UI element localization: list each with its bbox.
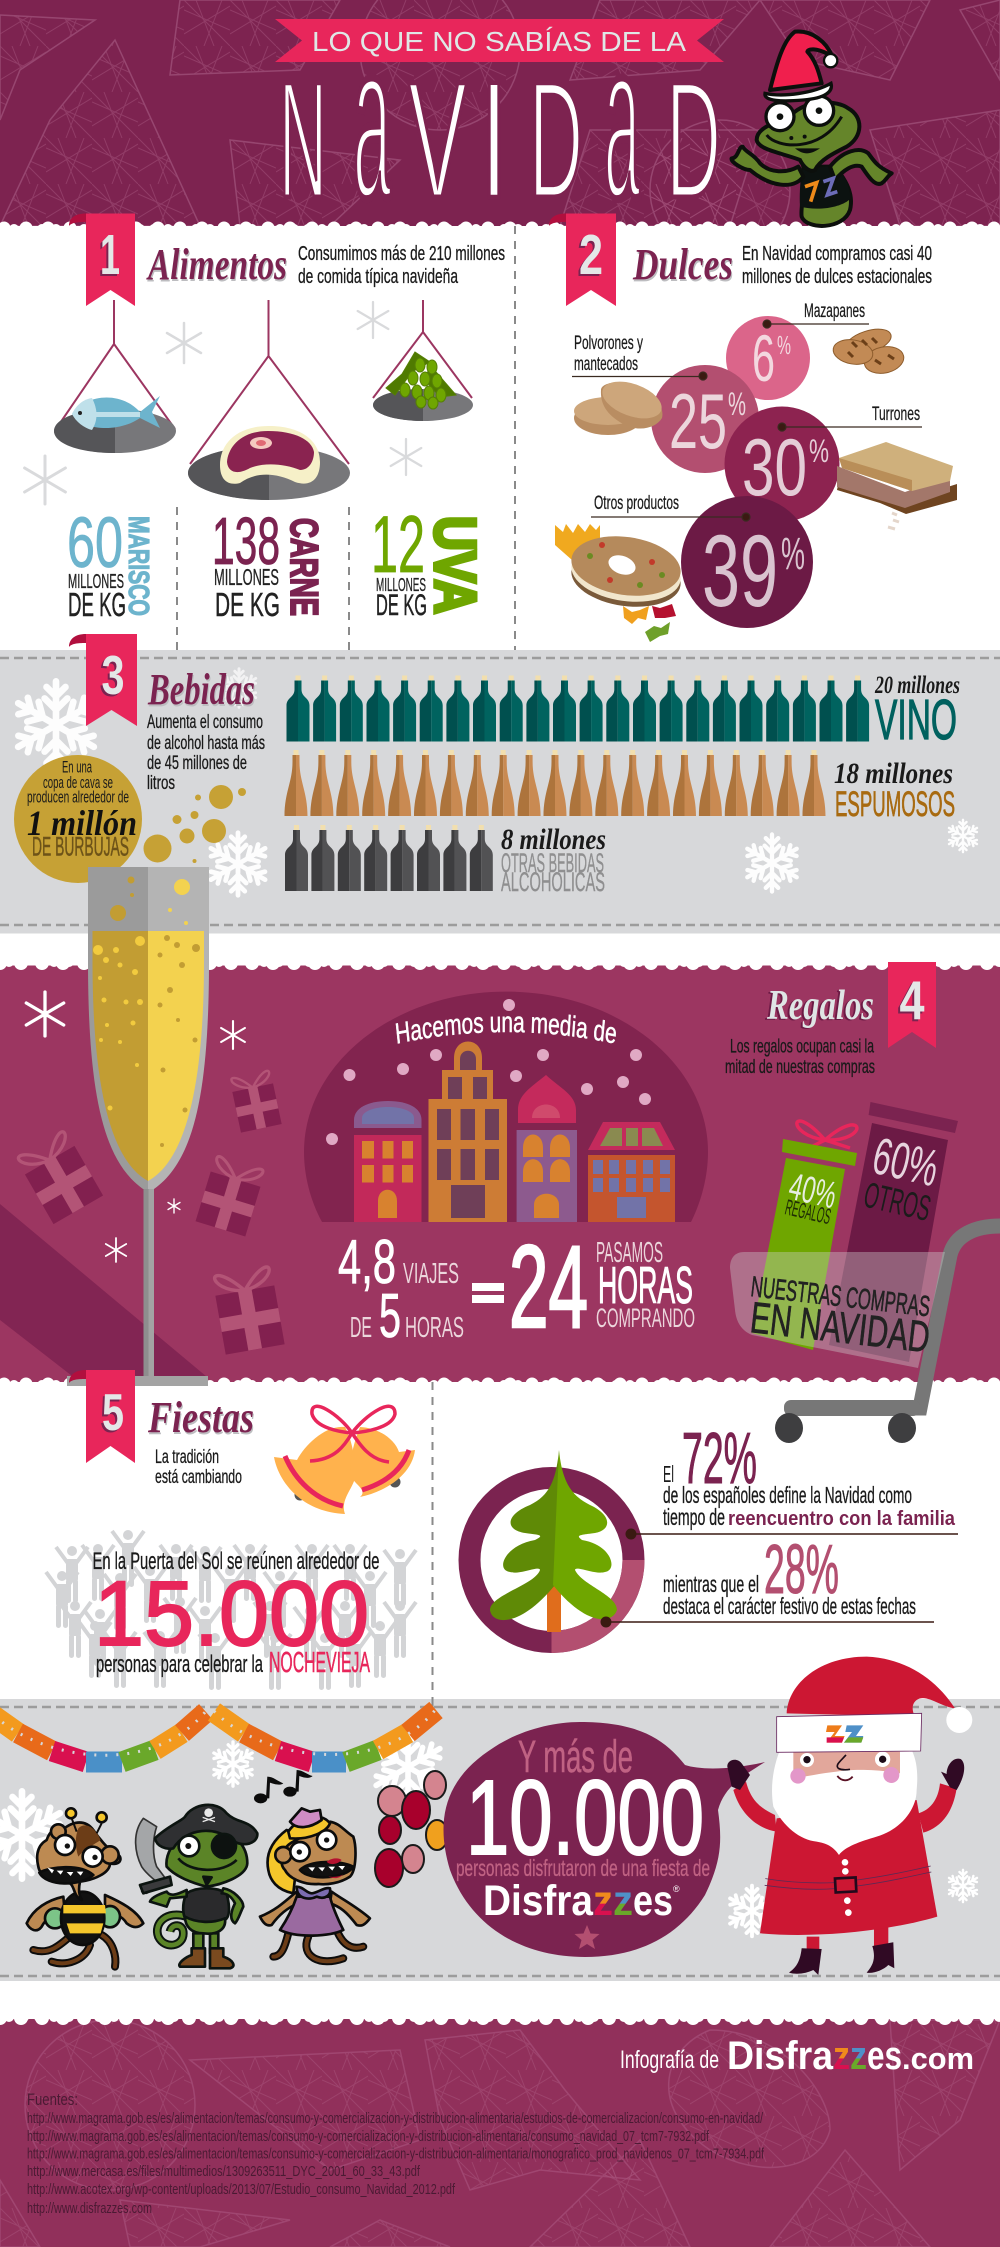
logo: disfrazzes: es (633, 1877, 673, 1925)
logo: infografia disfrazzes.com: es (867, 2034, 902, 2078)
icon: fish (72, 396, 160, 430)
panel: section 1 alimentos (25, 214, 505, 623)
icons: white stars (26, 992, 245, 1262)
building 1 (354, 1101, 422, 1222)
bow (797, 1121, 857, 1150)
stat: 60 marisco: 60 (67, 504, 123, 583)
bubble: 30 percent: 30 (742, 423, 807, 513)
scale: uva (373, 300, 473, 421)
label: espumosos (834, 757, 955, 824)
stat: 28 percent: mientras que el (663, 1571, 759, 1597)
ribbon number 1 (69, 214, 135, 306)
panel: section 3 bebidas (12, 634, 979, 897)
icon: paper garland (0, 1709, 436, 1762)
bubble: 30 percent: % (809, 433, 829, 469)
stat: 24 horas: 4,8 (338, 1228, 396, 1297)
text: puerta del sol: En la Puerta del Sol se reúnen alrededor de (92, 1548, 380, 1575)
text: D (666, 48, 721, 233)
callout: burbujas: En una (62, 758, 92, 776)
heading: bebidas: Bebidas (147, 665, 255, 714)
text: fuentes: http://www.magrama.gob.es/es/alimentacion/temas/consumo-y-comercializacion-y-distribucion-alimentaria/consumo_navidad_07_tcm7-7932.pdf (27, 2128, 710, 2145)
callout: speech bubble (443, 1722, 765, 1957)
stat: 138 carne: MILLONES (214, 564, 279, 590)
stat: 72 percent: tiempo de (663, 1504, 725, 1530)
text: tradicion: La tradición (155, 1446, 219, 1468)
panel: section 5 fiestas (46, 1370, 958, 1690)
bubble: 25 percent: % (728, 386, 746, 422)
labels: leader lines (572, 320, 922, 521)
text: dulces intro (742, 243, 932, 288)
logo: infografia disfrazzes.com: z (833, 2034, 850, 2078)
logo: disfrazzes: z (613, 1877, 633, 1925)
logo: infografia disfrazzes.com: z (850, 2034, 867, 2078)
stat: 138 carne: 138 (212, 504, 280, 579)
building 2 (428, 1042, 507, 1222)
icons: band snowflakes (0, 1730, 979, 1936)
divider: section 5 (432, 1382, 434, 1703)
text: hacemos una media de: Hacemos una media de (396, 1014, 616, 1044)
text: bebidas intro: de 45 millones de (147, 752, 247, 774)
panel: white scallop separators (0, 228, 1000, 1387)
panel: section 3 bebidas: OTRAS BEBIDAS (501, 848, 604, 878)
snow dots (326, 999, 651, 1145)
icon: turrones (837, 442, 957, 529)
stat: 138 carne: CARNE (282, 518, 325, 616)
stat: 138 carne (212, 504, 325, 623)
label: vino: 20 millones (874, 672, 960, 699)
bottles: espumosos (284, 750, 826, 816)
bubble: 6 percent: 6 (752, 321, 775, 395)
character: princess monkey (260, 1808, 370, 1961)
panel: header background (0, 0, 1000, 226)
text: fuentes: http://www.acotex.org/wp-content/uploads/2013/07/Estudio_consumo_Navidad_2012.pdf (27, 2181, 456, 2198)
panel: section 2 dulces (549, 214, 957, 642)
bubble: 6 percent (726, 316, 810, 400)
labels: sweets: mantecados (574, 354, 638, 375)
labels: sweets: Mazapanes (804, 301, 865, 322)
stat: 138 carne: DE KG (215, 586, 280, 623)
bubble: 6 percent: % (777, 330, 791, 360)
heading: dulces: Dulces (632, 240, 733, 289)
stat: 24 horas: PASAMOS (596, 1237, 663, 1269)
label: otras bebidas (501, 823, 606, 897)
stat: 12 uva: MILLONES (376, 575, 426, 595)
panel: gray drinks background (0, 650, 1000, 934)
label: vino (874, 672, 960, 752)
stat: 12 uva (371, 500, 487, 622)
labels: sweets: Otros productos (594, 493, 679, 514)
stat: 12 uva: 12 (371, 500, 425, 590)
text: y mas de: Y más de (518, 1731, 633, 1782)
text: fuentes (27, 2090, 765, 2217)
stat: 24 horas: 5 (379, 1282, 401, 1351)
text: regalos intro (725, 1036, 875, 1078)
icon: mazapanes (831, 324, 906, 377)
ribbon number 2 (549, 214, 616, 306)
stat: 72 percent: reencuentro con la familia (728, 1508, 956, 1530)
text: nochevieja: NOCHEVIEJA (269, 1647, 370, 1679)
building 3 (517, 1075, 577, 1222)
bubbles (144, 785, 246, 863)
stat: 24 horas: COMPRANDO (596, 1303, 695, 1333)
title: Navidad: N (279, 48, 327, 233)
callout: burbujas: producen alrededor de (27, 788, 129, 806)
character: pirate chameleon (136, 1805, 257, 1968)
text: consumo: de comida típica navideña (298, 266, 459, 288)
cart basket (730, 1252, 945, 1368)
bubble: 25 percent: 25 (669, 377, 727, 465)
panel: section 4 regalos (16, 946, 1000, 1443)
text: fuentes: http://www.mercasa.es/files/multimedios/1309263511_DYC_2001_60_33_43.pdf (27, 2163, 421, 2180)
icon: bells (274, 1406, 415, 1514)
cart text (748, 1271, 932, 1362)
gift bar: otros 60: 60% (867, 1127, 944, 1198)
gift bar: regalos 40: 40% (785, 1166, 840, 1217)
building 4 (588, 1122, 675, 1222)
ribbon number 5: 5 (102, 1384, 124, 1442)
text: nochevieja: personas para celebrar la (96, 1651, 263, 1678)
text: bebidas intro (147, 711, 265, 794)
heading: alimentos: Alimentos (146, 240, 287, 289)
icon: frog mascot with santa hat (732, 32, 892, 226)
dividers (177, 226, 515, 650)
text: consumo (298, 243, 505, 288)
chart: shopping cart with gifts (730, 1102, 1000, 1443)
icon: music notes (254, 1770, 313, 1803)
stat: 72 percent: El (663, 1461, 674, 1487)
icon: balloons (375, 1771, 448, 1887)
label: otras bebidas: 8 millones (501, 823, 606, 856)
crowd (46, 1530, 416, 1690)
title: Navidad: a (353, 0, 391, 245)
text: fuentes: http://www.disfrazzes.com (27, 2200, 152, 2217)
logo: infografia disfrazzes.com: Disfra (727, 2034, 834, 2078)
bottles: vino (286, 676, 869, 742)
title: Navidad (279, 0, 721, 245)
bubble: 39 percent: 39 (702, 514, 778, 628)
panel: town dome (304, 992, 708, 1222)
callout: burbujas: copa de cava se (43, 773, 113, 792)
ribbon number 4: 4 (900, 969, 925, 1031)
bubble: 25 percent (651, 365, 759, 473)
labels: sweets: Turrones (872, 404, 920, 425)
title: Navidad: I (480, 48, 508, 233)
icon: grapes (386, 352, 456, 409)
callout: burbujas (14, 755, 142, 883)
callout: burbujas: DE BURBUJAS (32, 832, 129, 862)
stat: 12 uva: UVA (422, 516, 487, 614)
ribbon number 2: 2 (579, 223, 603, 287)
label: espumosos: 18 millones (834, 757, 953, 790)
logo: infografia disfrazzes.com: Infografía de (620, 2046, 719, 2074)
icon: roscon (555, 524, 685, 613)
ribbon number 4 (888, 962, 936, 1048)
character: bee monkey (27, 1808, 143, 1967)
panel: footer (0, 2014, 1000, 2247)
logo: infografia disfrazzes.com (620, 2034, 974, 2078)
bubble: 39 percent: % (781, 528, 805, 579)
heading: fiestas: Fiestas (147, 1393, 254, 1442)
character: santa (727, 1657, 972, 1975)
logo: disfrazzes (483, 1877, 680, 1925)
callout: burbujas: 1 millón (27, 803, 137, 843)
labels: sweets: Polvorones y (574, 333, 643, 354)
stat: 28 percent (606, 1530, 934, 1622)
gift bar: regalos 40: REGALOS (783, 1195, 833, 1229)
stat: 60 marisco: DE KG (68, 586, 126, 623)
stat: 72 percent: 72% (682, 1419, 757, 1499)
text: regalos intro: mitad de nuestras compras (725, 1056, 875, 1078)
stat: 24 horas: HORAS (598, 1257, 693, 1315)
text: bebidas intro: Aumenta el consumo (147, 711, 263, 733)
scale: marisco (54, 300, 176, 453)
logo: disfrazzes: ® (673, 1884, 680, 1894)
ribbon number 1: 1 (100, 223, 120, 287)
labels: sweets (574, 301, 920, 514)
bottles: otras (285, 825, 493, 891)
text: bebidas intro: litros (147, 772, 175, 794)
text: tradicion: está cambiando (155, 1466, 242, 1488)
text: bebidas intro: de alcohol hasta más (147, 732, 265, 754)
logo: disfrazzes: Disfra (483, 1877, 594, 1925)
title: Navidad: a (604, 0, 640, 245)
ribbon number 5 (69, 1370, 135, 1463)
banner: lo que no sabias (275, 19, 724, 62)
stat: 60 marisco (67, 504, 154, 623)
stat: 60 marisco: MILLONES (68, 571, 124, 593)
snowflakes (12, 669, 979, 895)
icons: decorative gifts (16, 1070, 285, 1355)
text: tradicion (155, 1446, 242, 1488)
stat: 24 horas: 24 (509, 1221, 588, 1352)
text: fuentes: Fuentes: (27, 2090, 78, 2109)
panel: gray party band (0, 1699, 1000, 1981)
stat: 10.000: 10.000 (466, 1759, 704, 1877)
gift bar: otros 60: OTROS (860, 1174, 935, 1229)
logo: infografia disfrazzes.com: .com (902, 2041, 974, 2076)
panel: gifts background (0, 961, 1000, 1386)
banner: lo que no sabias: LO QUE NO SABÍAS DE LA (312, 26, 686, 57)
gift bar: regalos 40 (752, 1139, 857, 1350)
icon: polvorones (574, 374, 667, 435)
icon: champagne glass (67, 867, 209, 1386)
bubble: 30 percent (724, 406, 840, 522)
icon: candies (623, 604, 676, 642)
stat: 15.000: 15.000 (94, 1563, 369, 1665)
cart handle and wheels (775, 1226, 1000, 1443)
gift bar: otros 60 (829, 1102, 958, 1362)
label: otras bebidas: ALCOHOLICAS (501, 867, 605, 897)
ribbon number 3: 3 (102, 644, 124, 706)
chart: donut with tree (470, 1450, 636, 1642)
title: Navidad: D (529, 48, 583, 233)
title: Navidad: V (408, 48, 467, 233)
text: personas disfrutaron: personas disfrutaron de una fiesta de (456, 1855, 710, 1881)
stat: 72 percent (631, 1419, 958, 1534)
heading: regalos: Regalos (766, 983, 874, 1029)
stat: 24 horas: HORAS (405, 1312, 464, 1344)
stat: 24 horas: DE (350, 1312, 372, 1344)
logo: disfrazzes: z (593, 1877, 613, 1925)
icon: star (574, 1925, 600, 1949)
stat: 24 horas (338, 1221, 695, 1352)
ribbon number 3 (69, 634, 137, 726)
scale: carne (188, 300, 350, 500)
icons: asterisks (25, 302, 421, 504)
stat: 24 horas: VIAJES (403, 1258, 459, 1290)
text: regalos intro: Los regalos ocupan casi la (730, 1036, 874, 1058)
stat: 60 marisco: MARISCO (122, 516, 154, 616)
stat: 12 uva: DE KG (376, 589, 427, 622)
text: consumo: Consumimos más de 210 millones (298, 243, 505, 265)
stat: 28 percent: 28% (764, 1530, 839, 1608)
